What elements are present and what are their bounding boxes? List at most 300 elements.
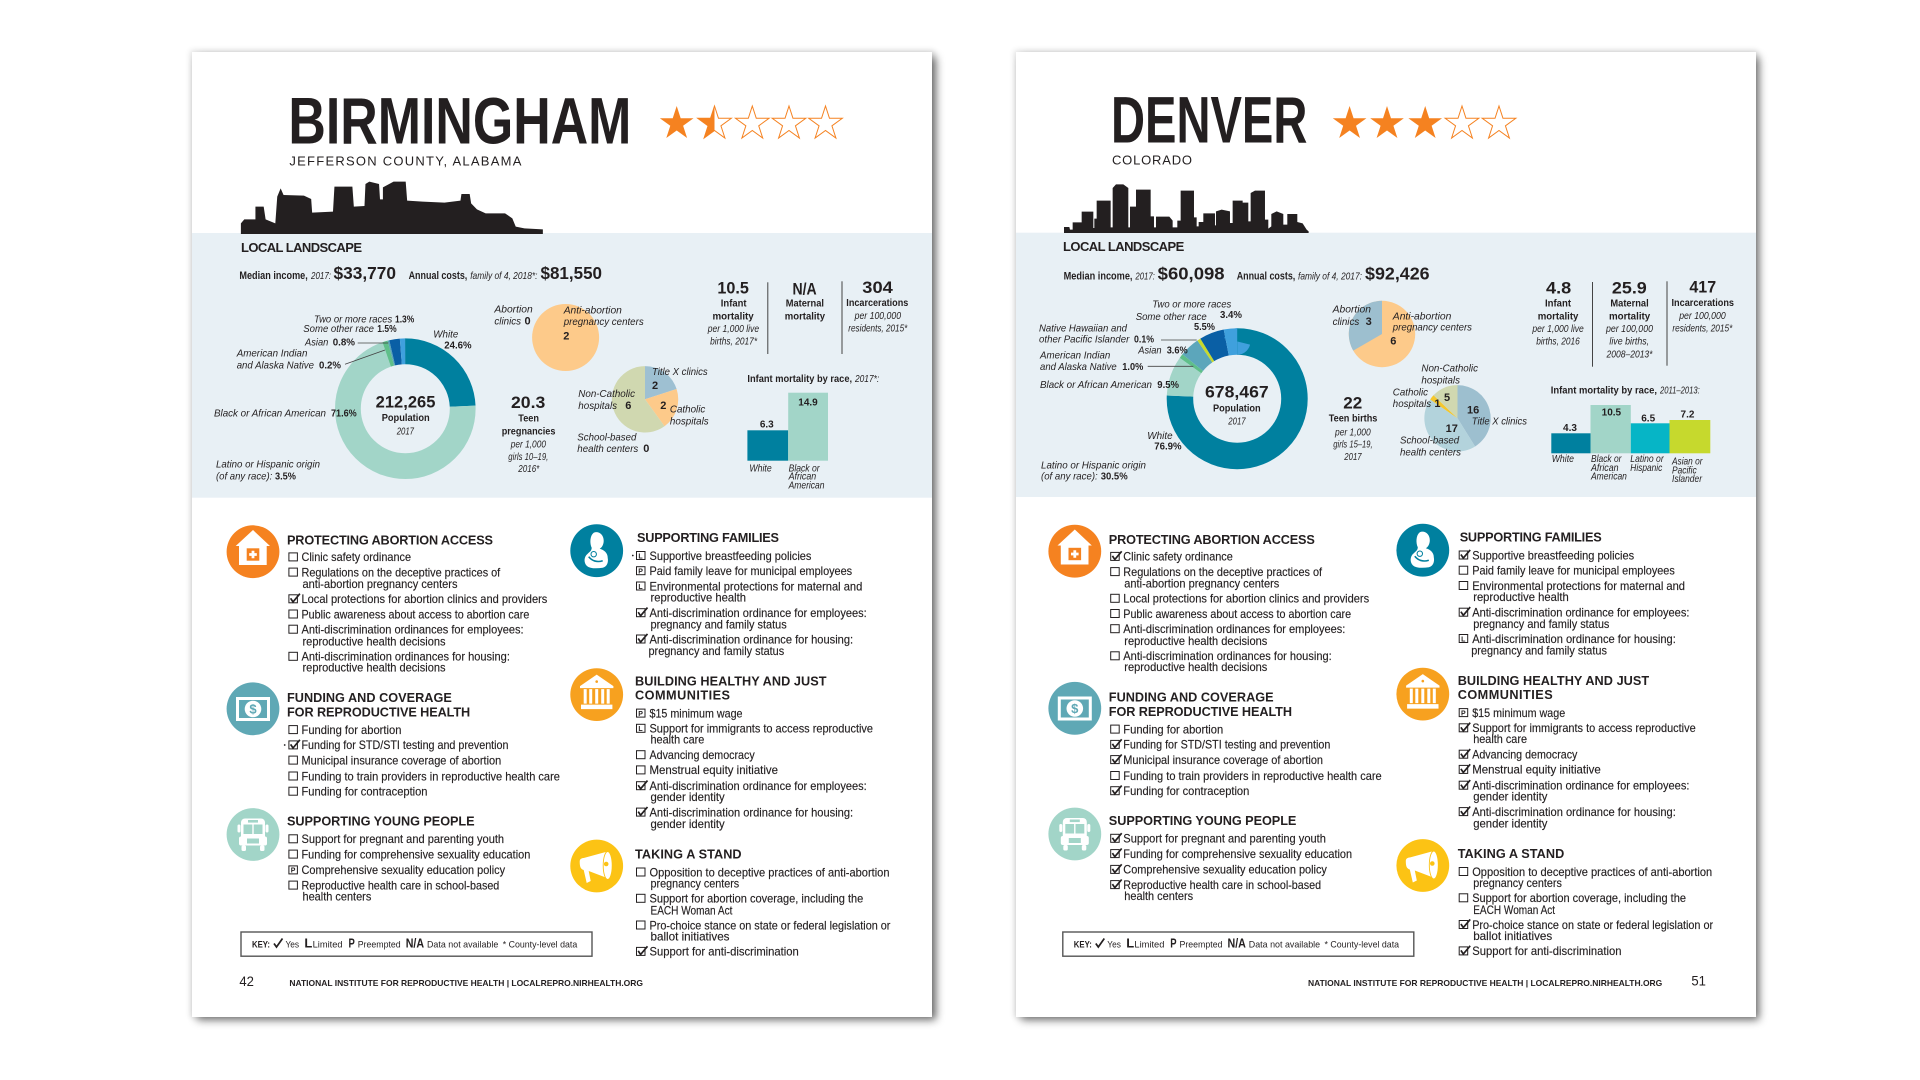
income and costs: $81,550	[540, 263, 602, 283]
stat: teen pregnancies: 2016*	[518, 463, 540, 475]
policy list: Public awareness about access to abortion care	[1123, 607, 1351, 621]
pie chart: clinics and hospitals: Catholic	[670, 403, 706, 415]
panel: supporting families, Denver	[1396, 524, 1689, 658]
key: Yes	[286, 939, 299, 950]
donut labels: 30.5%	[1101, 470, 1128, 482]
policy list: health centers	[1124, 889, 1193, 903]
policy list: Supportive breastfeeding policies	[1472, 548, 1634, 562]
bar chart: infant mortality by race: Infant mortality by race,	[1551, 385, 1657, 397]
policy list	[1111, 722, 1382, 798]
policy list: Anti-discrimination ordinances for employees:	[1123, 622, 1345, 636]
policy list: Local protections for abortion clinics and providers	[1123, 592, 1369, 606]
key: Preempted	[358, 939, 401, 950]
donut labels: 71.6%	[331, 408, 357, 420]
donut labels: Population	[1213, 403, 1261, 415]
heading	[635, 675, 827, 702]
key: P	[348, 935, 355, 950]
policy list: Anti-discrimination ordinance for housing:	[650, 632, 853, 646]
bar chart: infant mortality by race: Black or	[1591, 453, 1622, 465]
panel: funding and coverage	[227, 682, 560, 798]
pie chart: clinics and hospitals: 1	[1434, 398, 1441, 410]
heading: local landscape: LOCAL LANDSCAPE	[1063, 239, 1185, 254]
panel: taking a stand	[570, 840, 890, 959]
policy list: health care	[650, 733, 705, 747]
footer: NATIONAL INSTITUTE FOR REPRODUCTIVE HEALTH | LOCALREPRO.NIRHEALTH.ORG	[289, 978, 643, 988]
donut labels: 212,265	[376, 393, 435, 411]
policy list: Environmental protections for maternal and	[1472, 579, 1685, 593]
donut labels: White	[1147, 430, 1173, 442]
policy list: Support for pregnant and parenting youth	[302, 832, 504, 846]
heading	[287, 691, 470, 719]
income and costs	[1064, 264, 1430, 284]
donut labels: 5.5%	[1194, 321, 1216, 333]
bar chart: infant mortality by race: 14.9	[798, 397, 818, 408]
policy list: Comprehensive sexuality education policy	[302, 863, 505, 877]
bar chart: infant mortality by race: Hispanic	[1630, 462, 1663, 474]
policy list: Pro-choice stance on state or federal legislation or	[1472, 918, 1713, 932]
bar chart: infant mortality by race: White	[749, 462, 772, 474]
donut labels: 3.4%	[1220, 309, 1243, 321]
key: L	[304, 935, 312, 950]
donut labels: Black or African American	[214, 408, 326, 420]
policy list: pregnancy and family status	[648, 644, 784, 658]
policy list: Opposition to deceptive practices of anti-abortion	[1472, 865, 1712, 879]
heading: SUPPORTING YOUNG PEOPLE	[287, 815, 475, 829]
policy list: reproductive health decisions	[302, 661, 446, 675]
stats: mortality and incarcerations: N/A	[792, 280, 817, 298]
stats: mortality and incarcerations: births, 2017*	[710, 336, 758, 348]
bar chart: infant mortality by race: Infant mortality by race,	[747, 373, 852, 385]
donut labels: 0.8%	[333, 337, 356, 349]
pie chart: abortion clinics and anti-abortion centers: clinics	[1333, 316, 1360, 328]
stats: mortality and incarcerations: mortality	[712, 310, 754, 322]
policy list: Anti-discrimination ordinance for employees:	[1472, 778, 1689, 792]
policy list: EACH Woman Act	[1473, 903, 1556, 917]
donut labels: and Alaska Native	[1040, 361, 1117, 373]
donut labels: American Indian	[236, 348, 308, 360]
donut labels: 0.1%	[1134, 334, 1155, 346]
pie chart: abortion clinics and anti-abortion centers: Anti-abortion	[563, 304, 622, 316]
policy list: ballot initiatives	[1473, 929, 1552, 943]
policy list: gender identity	[1473, 790, 1547, 804]
donut labels: Black or African American	[1040, 379, 1152, 391]
title: DENVER	[1111, 82, 1307, 156]
stats: mortality and incarcerations: Maternal	[786, 298, 824, 310]
policy list: Clinic safety ordinance	[1123, 550, 1233, 564]
pie chart: abortion clinics and anti-abortion centers	[1332, 301, 1473, 367]
stat: teen births: per 1,000	[1334, 426, 1371, 438]
donut labels: 1.5%	[377, 323, 397, 335]
bar chart: infant mortality by race: American	[1590, 470, 1627, 482]
heading: FUNDING AND COVERAGE	[287, 691, 452, 705]
policy list: Support for immigrants to access reproductive	[650, 722, 873, 736]
policy list: P	[1461, 710, 1466, 717]
policy list: Anti-discrimination ordinance for housing:	[1472, 632, 1676, 646]
stats: mortality and incarcerations: 2008–2013*	[1606, 348, 1653, 360]
heading: SUPPORTING FAMILIES	[1460, 530, 1602, 544]
bar chart: infant mortality by race: African	[788, 471, 816, 483]
stat: teen pregnancies	[502, 394, 556, 475]
pie chart: clinics and hospitals: 0	[643, 443, 649, 455]
skyline	[241, 182, 543, 234]
policy list: L	[1461, 636, 1466, 643]
donut labels: 2017	[1228, 415, 1246, 427]
policy list: Reproductive health care in school-based	[302, 878, 499, 892]
donut labels: Population	[382, 412, 430, 424]
donut labels: 1.3%	[395, 313, 415, 325]
bar chart: infant mortality by race: 2017*:	[854, 373, 879, 385]
donut labels: (of any race):	[216, 470, 272, 482]
policy list: Anti-discrimination ordinances for housing:	[302, 650, 510, 664]
pie chart: abortion clinics and anti-abortion centers: Abortion	[493, 303, 533, 315]
policy list: Anti-discrimination ordinance for employees:	[650, 606, 867, 620]
donut labels: 2017	[396, 425, 415, 437]
pie chart: abortion clinics and anti-abortion centers: 0	[524, 315, 531, 327]
policy list: Municipal insurance coverage of abortion	[302, 753, 501, 767]
page shadow: Birmingham	[190, 50, 936, 1020]
pie chart: abortion clinics and anti-abortion centers: clinics	[494, 315, 522, 327]
pie chart: clinics and hospitals: Title X clinics	[652, 366, 708, 378]
icon: megaphone	[570, 840, 623, 892]
policy list: reproductive health	[650, 590, 746, 604]
key, Denver: L	[1126, 935, 1134, 950]
pie chart: clinics and hospitals	[1393, 362, 1528, 458]
policy list: Regulations on the deceptive practices of	[302, 565, 501, 579]
pie chart: clinics and hospitals: hospitals	[578, 400, 618, 412]
income and costs: $60,098	[1158, 264, 1225, 284]
policy list: Funding to train providers in reproductive health care	[1123, 769, 1382, 783]
policy list: ballot initiatives	[650, 930, 730, 944]
pie chart: clinics and hospitals: health centers	[1400, 446, 1462, 458]
pie chart: abortion clinics and anti-abortion centers: 3	[1366, 316, 1372, 328]
heading: SUPPORTING YOUNG PEOPLE	[1109, 814, 1296, 828]
policy list: P	[291, 868, 296, 875]
policy list	[1111, 832, 1352, 903]
policy list: Supportive breastfeeding policies	[650, 549, 811, 563]
donut labels	[1039, 299, 1269, 482]
policy list: Support for anti-discrimination	[1472, 944, 1622, 958]
donut labels: other Pacific Islander	[1039, 334, 1130, 346]
donut labels: Asian	[304, 337, 328, 349]
policy list: L	[638, 584, 643, 591]
footer: NATIONAL INSTITUTE FOR REPRODUCTIVE HEALTH | LOCALREPRO.NIRHEALTH.ORG	[1308, 978, 1663, 988]
income and costs: family of 4, 2018*:	[470, 270, 538, 282]
pie chart: clinics and hospitals: School-based	[1400, 434, 1460, 446]
policy list: Reproductive health care in school-based	[1123, 878, 1321, 892]
key, Denver: N/A	[1228, 935, 1246, 950]
policy list: Support for immigrants to access reproductive	[1472, 721, 1696, 735]
icon: banknote: $	[249, 702, 257, 717]
policy list: Support for abortion coverage, including the	[650, 892, 864, 906]
heading: PROTECTING ABORTION ACCESS	[287, 533, 493, 547]
policy list	[1459, 548, 1689, 658]
stats: mortality and incarcerations: Infant	[721, 298, 747, 310]
policy list: reproductive health decisions	[1124, 634, 1267, 648]
policy list: Pro-choice stance on state or federal legislation or	[650, 918, 890, 932]
donut labels: 76.9%	[1154, 440, 1182, 452]
policy list: Public awareness about access to abortion care	[302, 607, 530, 621]
bar chart: infant mortality by race: 6.3	[760, 420, 774, 431]
policy list: Environmental protections for maternal and	[650, 579, 862, 593]
stat: teen pregnancies: pregnancies	[502, 426, 556, 438]
page shadow: Denver	[1014, 50, 1759, 1020]
stats: mortality and incarcerations: residents, 2015*	[848, 322, 908, 334]
stat: teen births: girls 15–19,	[1333, 438, 1373, 450]
donut labels	[214, 313, 472, 482]
key	[241, 932, 592, 956]
heading: BUILDING HEALTHY AND JUST	[635, 675, 827, 689]
donut labels: Some other race	[303, 323, 374, 335]
icon: banknote	[227, 682, 279, 735]
bar chart: infant mortality by race: Islander	[1672, 473, 1702, 485]
landscape band	[1016, 233, 1756, 497]
income and costs	[239, 263, 602, 283]
heading: TAKING A STAND	[635, 847, 742, 861]
policy list: reproductive health decisions	[302, 634, 446, 648]
donut labels: Latino or Hispanic origin	[1041, 459, 1146, 471]
stats: mortality and incarcerations: Incarcerations	[1672, 297, 1734, 309]
icon: mother and child	[570, 524, 623, 577]
pie chart: clinics and hospitals: 6	[625, 400, 631, 412]
heading: local landscape: LOCAL LANDSCAPE	[241, 240, 362, 255]
pie chart: abortion clinics and anti-abortion centers: Abortion	[1332, 304, 1371, 316]
stats: mortality and incarcerations: mortality	[785, 310, 825, 322]
policy list: Advancing democracy	[1472, 748, 1577, 762]
panel: building healthy and just communities	[570, 668, 873, 831]
key: Data not available	[427, 939, 498, 950]
heading: FOR REPRODUCTIVE HEALTH	[287, 705, 470, 719]
donut labels: Two or more races	[314, 313, 393, 325]
bar chart: infant mortality by race	[747, 373, 879, 492]
stat: teen births	[1329, 394, 1378, 463]
stats: mortality and incarcerations: 10.5	[717, 280, 749, 298]
stats: mortality and incarcerations	[1532, 278, 1734, 367]
policy list: Funding for comprehensive sexuality education	[1123, 847, 1352, 861]
donut labels: Latino or Hispanic origin	[216, 459, 320, 471]
key, Denver	[1063, 932, 1414, 956]
policy list	[636, 865, 890, 959]
policy list: Funding for STD/STI testing and prevention	[302, 738, 508, 752]
policy list: reproductive health decisions	[1124, 660, 1267, 674]
policy list: Funding for abortion	[302, 723, 401, 737]
stats: mortality and incarcerations: per 1,000 live	[707, 323, 759, 335]
policy list: anti-abortion pregnancy centers	[302, 577, 458, 591]
key: N/A	[406, 935, 425, 950]
policy list: Anti-discrimination ordinance for employees:	[1472, 606, 1689, 620]
title: BIRMINGHAM	[288, 83, 631, 157]
policy list: $15 minimum wage	[650, 706, 743, 720]
donut labels: 24.6%	[444, 339, 472, 351]
policy list: EACH Woman Act	[650, 903, 733, 917]
heading: COMMUNITIES	[1458, 688, 1553, 702]
bar chart: infant mortality by race	[1551, 385, 1710, 485]
key, Denver: Data not available	[1249, 939, 1320, 950]
heading: PROTECTING ABORTION ACCESS	[1109, 533, 1315, 547]
pie chart: clinics and hospitals: hospitals	[670, 415, 709, 427]
policy list: Advancing democracy	[650, 748, 755, 762]
bar chart: infant mortality by race: 6.5	[1641, 414, 1656, 425]
heading: SUPPORTING FAMILIES	[637, 531, 779, 545]
pie chart: clinics and hospitals: Title X clinics	[1472, 416, 1528, 428]
donut labels: 0.2%	[319, 360, 342, 372]
policy list	[636, 706, 873, 831]
policy list: gender identity	[650, 817, 725, 831]
policy list	[289, 832, 530, 904]
bar chart: infant mortality by race: Black or	[789, 462, 820, 474]
donut labels: 9.5%	[1157, 379, 1180, 391]
policy list: Support for pregnant and parenting youth	[1123, 832, 1326, 846]
policy list: L	[638, 553, 643, 560]
pie chart: clinics and hospitals: 5	[1444, 392, 1450, 404]
policy list: Support for abortion coverage, including the	[1472, 891, 1686, 905]
pie chart: clinics and hospitals: Non-Catholic	[578, 388, 636, 400]
icon: banknote: $	[1071, 701, 1079, 716]
donut labels: 3.5%	[275, 470, 297, 482]
policy list: Funding to train providers in reproductive health care	[302, 769, 560, 783]
donut labels: White	[433, 328, 458, 340]
pie chart: clinics and hospitals: health centers	[577, 443, 639, 455]
donut labels: (of any race):	[1041, 470, 1098, 482]
key: KEY:	[252, 939, 270, 950]
stat: teen pregnancies: Teen	[518, 413, 539, 425]
pie chart: abortion clinics and anti-abortion centers: pregnancy centers	[563, 316, 644, 328]
pie chart: abortion clinics and anti-abortion centers: pregnancy centers	[1392, 322, 1473, 334]
policy list	[1111, 550, 1369, 674]
heading: COMMUNITIES	[635, 688, 730, 702]
donut labels: 3.6%	[1167, 344, 1188, 356]
stats: mortality and incarcerations: 4.8	[1546, 279, 1571, 297]
policy list	[1459, 865, 1713, 958]
star rating 1.5 of 5	[660, 106, 842, 138]
key, Denver: Limited	[1134, 939, 1164, 950]
stat: teen pregnancies: per 1,000	[510, 439, 546, 451]
policy list: $15 minimum wage	[1472, 706, 1565, 720]
key, Denver: P	[1170, 935, 1177, 950]
stats: mortality and incarcerations: Maternal	[1610, 298, 1649, 310]
donut labels: Native Hawaiian and	[1039, 323, 1128, 335]
stats: mortality and incarcerations: Infant	[1545, 298, 1571, 310]
policy list: Anti-discrimination ordinances for employees:	[302, 622, 524, 636]
pie chart: clinics and hospitals: 2	[660, 400, 666, 412]
key, Denver: * County-level data	[1324, 939, 1400, 950]
panel: Birmingham page	[192, 52, 932, 1017]
policy list: gender identity	[650, 790, 725, 804]
policy list: Local protections for abortion clinics and providers	[302, 592, 547, 606]
income and costs: Annual costs,	[409, 270, 467, 282]
stat: teen births: 2017	[1344, 451, 1362, 463]
panel: Denver page	[1016, 52, 1756, 1017]
stats: mortality and incarcerations: 417	[1689, 278, 1716, 296]
policy list: P	[638, 568, 643, 576]
policy list: pregnancy and family status	[650, 618, 787, 632]
bar chart: infant mortality by race: African	[1590, 462, 1619, 474]
income and costs: Median income,	[239, 270, 308, 282]
panel: funding and coverage, Denver	[1048, 682, 1382, 798]
stats: mortality and incarcerations: per 100,000	[1678, 310, 1726, 322]
page number: 51	[1691, 974, 1706, 988]
pie chart: clinics and hospitals: Catholic	[1393, 387, 1429, 399]
policy list: gender identity	[1473, 816, 1547, 830]
subtitle: JEFFERSON COUNTY, ALABAMA	[289, 154, 522, 168]
policy list: L	[638, 726, 643, 733]
policy list	[284, 723, 560, 798]
policy list: Clinic safety ordinance	[302, 550, 411, 564]
stats: mortality and incarcerations: Incarcerations	[846, 297, 908, 309]
policy list: Funding for contraception	[302, 784, 428, 798]
policy list	[1459, 706, 1696, 830]
panel: supporting families	[570, 524, 867, 658]
donut chart: population by race	[1180, 341, 1294, 456]
heading	[1458, 674, 1649, 702]
stats: mortality and incarcerations: births, 2016	[1536, 336, 1580, 348]
income and costs: 2017:	[1135, 271, 1155, 283]
policy list: Comprehensive sexuality education policy	[1123, 863, 1327, 877]
policy list: Menstrual equity initiative	[1472, 763, 1601, 777]
income and costs: Median income,	[1064, 271, 1132, 283]
policy list: Paid family leave for municipal employees	[1472, 564, 1675, 578]
icon: mother and child	[1396, 524, 1449, 577]
icon: house	[227, 525, 279, 578]
policy list: Funding for STD/STI testing and prevention	[1123, 738, 1330, 752]
income and costs: $92,426	[1365, 264, 1430, 284]
policy list: Anti-discrimination ordinance for housing:	[650, 805, 853, 819]
policy list: health centers	[302, 890, 371, 904]
stats: mortality and incarcerations: residents, 2015*	[1672, 322, 1733, 334]
policy list	[289, 550, 547, 675]
pie chart: abortion clinics and anti-abortion centers: Anti-abortion	[1392, 310, 1452, 322]
policy list: P	[638, 711, 643, 718]
policy list: Funding for comprehensive sexuality education	[302, 847, 530, 861]
donut labels: American Indian	[1039, 350, 1110, 362]
policy list: Regulations on the deceptive practices of	[1123, 565, 1323, 579]
landscape band	[192, 233, 932, 498]
heading: FUNDING AND COVERAGE	[1109, 690, 1274, 704]
policy list: Funding for contraception	[1123, 784, 1249, 798]
pie chart: abortion clinics and anti-abortion centers: 2	[563, 330, 569, 342]
bar chart: infant mortality by race: 4.3	[1563, 423, 1577, 434]
policy list: Support for anti-discrimination	[650, 945, 799, 959]
donut labels: 1.0%	[1122, 361, 1144, 373]
heading: BUILDING HEALTHY AND JUST	[1458, 674, 1649, 688]
star rating 3 of 5	[1333, 106, 1516, 138]
heading	[1109, 690, 1292, 719]
stats: mortality and incarcerations: 25.9	[1612, 279, 1647, 297]
panel: protecting abortion access	[227, 525, 547, 675]
bar chart: infant mortality by race: American	[788, 480, 825, 492]
income and costs: $33,770	[334, 263, 396, 283]
policy list: Municipal insurance coverage of abortion	[1123, 753, 1323, 767]
policy list: Opposition to deceptive practices of anti-abortion	[650, 865, 890, 879]
donut labels: 678,467	[1205, 384, 1269, 402]
stats: mortality and incarcerations: live births,	[1609, 336, 1649, 348]
donut labels: Two or more races	[1152, 299, 1232, 311]
policy list	[632, 549, 867, 658]
policy list: Paid family leave for municipal employees	[650, 564, 852, 578]
key, Denver: Yes	[1107, 939, 1121, 950]
panel: supporting young people	[227, 808, 530, 904]
stats: mortality and incarcerations: per 100,000	[854, 310, 901, 322]
icon: school bus	[227, 808, 279, 861]
skyline	[1064, 184, 1309, 233]
bar chart: infant mortality by race: Pacific	[1672, 464, 1697, 476]
key: * County-level data	[503, 939, 578, 950]
panel: supporting young people, Denver	[1048, 808, 1352, 903]
policy list: pregnancy centers	[1473, 876, 1562, 890]
stats: mortality and incarcerations: 304	[862, 279, 894, 297]
policy list: Funding for abortion	[1123, 722, 1223, 736]
policy list: Anti-discrimination ordinance for employees:	[650, 779, 867, 793]
page number: 42	[239, 974, 254, 989]
